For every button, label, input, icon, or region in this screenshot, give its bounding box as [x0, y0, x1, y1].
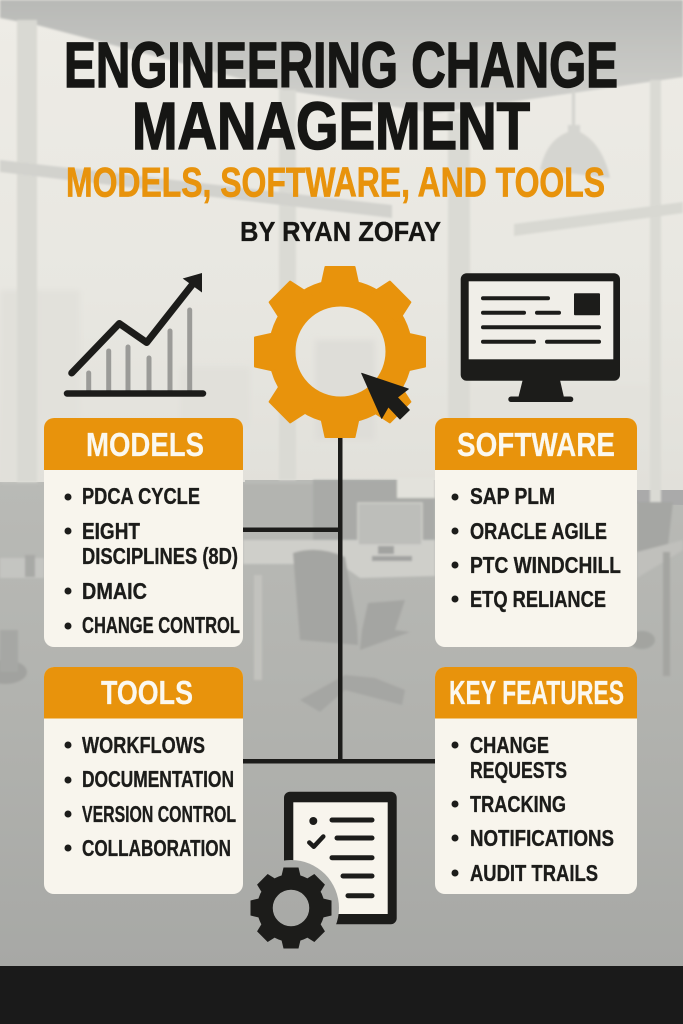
list: software: ETQ RELIANCE	[470, 586, 606, 612]
title: MANAGEMENT	[132, 89, 530, 164]
byline: BY RYAN ZOFAY	[240, 216, 441, 247]
list: key features	[452, 732, 614, 886]
footer band	[0, 966, 683, 1024]
list: tools: DOCUMENTATION	[82, 766, 234, 792]
list: models: DMAIC	[82, 578, 147, 604]
icon: computer monitor	[461, 273, 620, 402]
list: models: PDCA CYCLE	[82, 483, 200, 509]
list: key features: TRACKING	[470, 791, 566, 817]
icon: cursor arrow	[362, 373, 409, 419]
panel header: models	[44, 418, 243, 470]
list: key features: CHANGE	[470, 732, 549, 758]
panel: software	[435, 418, 637, 647]
panel header: key features	[435, 667, 637, 718]
icon: line chart	[67, 273, 203, 394]
list: software: SAP PLM	[470, 483, 555, 509]
icon: orange gear	[255, 267, 425, 437]
list: key features: NOTIFICATIONS	[470, 825, 614, 851]
list: tools: WORKFLOWS	[82, 732, 205, 758]
list: models: EIGHT	[82, 518, 140, 544]
list: key features: REQUESTS	[470, 757, 567, 783]
panel header: tools	[44, 667, 243, 718]
list: models: DISCIPLINES (8D)	[82, 543, 238, 569]
list: models: CHANGE CONTROL	[82, 612, 240, 638]
list: key features: AUDIT TRAILS	[470, 860, 598, 886]
list: software: PTC WINDCHILL	[470, 552, 621, 578]
title	[64, 29, 618, 164]
list: software	[452, 483, 621, 612]
decorative office furniture	[313, 480, 435, 548]
icon: checklist document	[284, 792, 397, 924]
connector lines	[243, 430, 435, 764]
panel header: models: MODELS	[86, 426, 204, 463]
panel header: tools: TOOLS	[101, 674, 193, 711]
panel header: software: SOFTWARE	[457, 426, 615, 463]
list: tools: COLLABORATION	[82, 835, 231, 861]
panel header: software	[435, 418, 637, 470]
list: software: ORACLE AGILE	[470, 518, 607, 544]
panel: models	[44, 418, 243, 647]
list: models	[64, 483, 240, 638]
icon: black gear with halo	[243, 860, 339, 956]
list: tools: VERSION CONTROL	[82, 801, 236, 827]
list: tools	[64, 732, 236, 861]
panel: tools	[44, 667, 243, 894]
panel: key features	[435, 667, 637, 894]
